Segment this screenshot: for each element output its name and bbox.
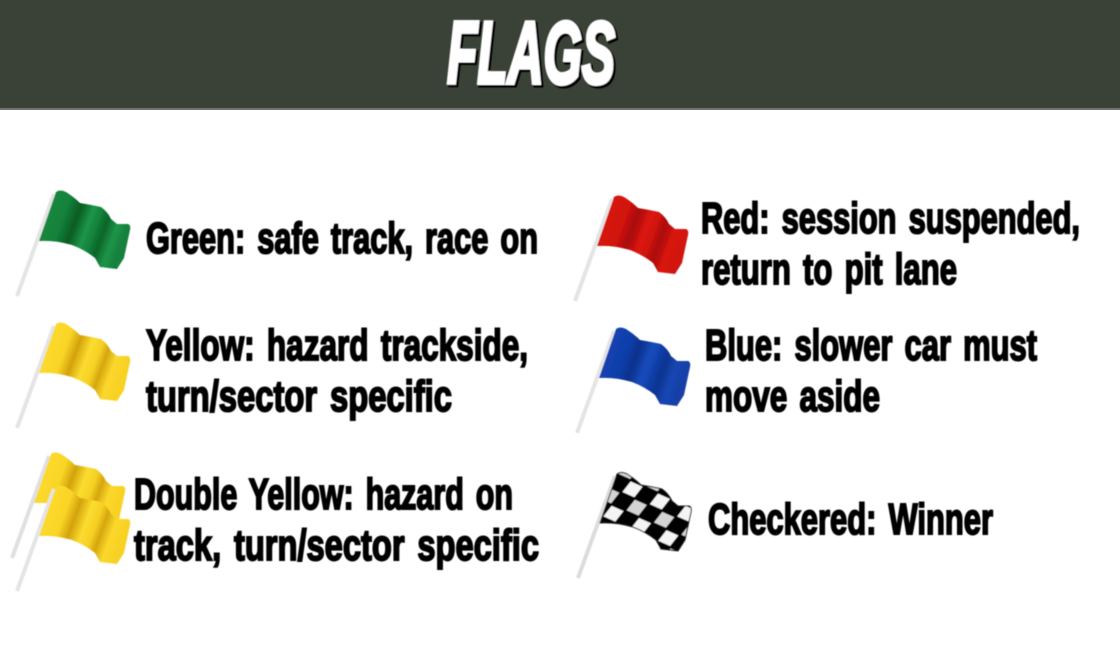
icon: checkered flag: [578, 472, 691, 578]
label: red: [701, 194, 1080, 294]
title: FLAGS: [449, 5, 617, 104]
icon: yellow flag: [17, 322, 130, 428]
icon: red flag: [575, 196, 688, 301]
label: yellow: Yellow: hazard trackside,: [146, 321, 528, 370]
icon: blue flag: [577, 328, 690, 433]
header band: [0, 0, 1120, 110]
label: red: return to pit lane: [701, 245, 957, 294]
label: checkered: Checkered: Winner: [708, 495, 993, 544]
label: yellow: turn/sector specific: [146, 372, 452, 421]
title: [447, 3, 617, 104]
label: yellow: [146, 321, 528, 421]
icon: double yellow flags: [12, 452, 130, 591]
label: double yellow: Double Yellow: hazard on: [134, 470, 513, 519]
label: double yellow: [134, 470, 539, 570]
label: double yellow: track, turn/sector specific: [134, 521, 539, 570]
label: blue: [705, 321, 1037, 421]
icon: green flag: [17, 190, 130, 296]
title: FLAGS: [447, 3, 615, 102]
label: green: Green: safe track, race on: [146, 214, 538, 263]
label: blue: move aside: [705, 372, 880, 421]
